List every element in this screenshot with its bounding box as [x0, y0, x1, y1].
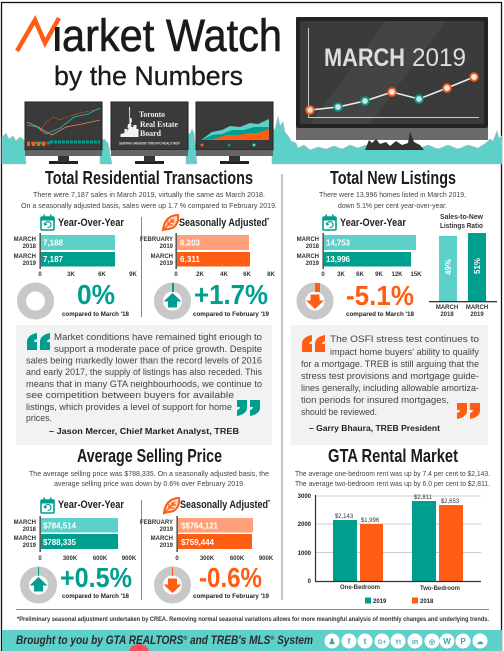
bar chart: 7,188 — [43, 238, 64, 248]
intro text: The average selling price was $788,335. On a seasonally adjusted basis, the — [29, 469, 269, 478]
bar chart — [14, 516, 137, 562]
bar chart: 2018 — [23, 527, 37, 533]
footer text: ® — [270, 635, 275, 642]
quote text: support a moderate pace of price growth. Despite — [54, 344, 262, 354]
seasonally adjusted block — [140, 498, 274, 600]
subheading: Seasonally Adjusted — [179, 217, 286, 229]
bar chart: 2018 — [23, 244, 37, 250]
sales-to-new listings ratio chart: 51% — [473, 258, 482, 274]
bar chart: MARCH — [151, 254, 173, 260]
header banner — [2, 10, 502, 164]
heading: Average Selling Price — [77, 446, 222, 466]
icon: calendar — [41, 214, 54, 230]
quote text: lines generally, including allowable amortiza- — [301, 383, 479, 393]
rental bar chart: $2,811 — [414, 495, 433, 501]
footer text: System — [274, 635, 313, 647]
bar chart: 0 — [174, 272, 178, 278]
social icons: G+ — [378, 640, 387, 646]
quote text: Market conditions have remained tight enough to — [54, 332, 262, 342]
donut: up arrow — [24, 567, 52, 599]
caption: compared to March '18 — [62, 311, 129, 318]
quote text: see competition between buyers for available — [26, 390, 234, 400]
legend — [365, 598, 434, 605]
rental bar chart: 0 — [308, 579, 312, 585]
social icons: ◎ — [429, 639, 435, 646]
sales-to-new listings ratio chart: MARCH — [466, 305, 488, 311]
panel: total new listings — [297, 168, 497, 318]
rental bar chart: $1,996 — [361, 518, 380, 524]
monitor title: March 2019: 2019 — [412, 44, 466, 72]
stat: 0%: 0% — [77, 279, 115, 310]
bar chart: $784,514 — [43, 522, 77, 530]
bar chart: 900K — [259, 556, 274, 562]
quote text — [301, 334, 479, 417]
year-over-year block — [14, 214, 138, 318]
intro text — [29, 469, 269, 488]
subheading: Seasonally Adjusted — [180, 499, 287, 511]
bar chart: MARCH — [14, 520, 36, 526]
rental bar chart: Two-Bedroom — [420, 586, 460, 592]
panel: average selling price — [14, 446, 274, 600]
footnote: *Preliminary seasonal adjustment undertaken by CREA. Removing normal seasonal variations allows for more meaningful analysis of monthly changes and underlying trends. — [17, 617, 489, 623]
footnote rule — [16, 609, 489, 610]
rental bar chart: One-Bedroom — [340, 585, 380, 591]
quote text: listings, which provides a level of support for home — [26, 402, 232, 412]
social icons: Yt — [395, 640, 401, 646]
bar chart: MARCH — [14, 254, 36, 260]
legend: 2019 — [373, 599, 387, 605]
footer text: and TREB's MLS — [187, 635, 271, 647]
quote panel: Garry Bhaura — [291, 325, 488, 445]
bar chart — [297, 233, 422, 278]
intro text: On a seasonally adjusted basis, sales were up 1.7 % compared to February 2019. — [21, 201, 277, 210]
subheading: Year-Over-Year — [58, 499, 125, 511]
subheading: Year-Over-Year — [340, 217, 407, 229]
bar chart: 0 — [175, 556, 179, 562]
bar chart: 0 — [38, 556, 42, 562]
big monitor — [296, 17, 488, 150]
bar chart: 2019 — [160, 244, 174, 250]
caption: compared to March '18 — [346, 311, 414, 318]
subheading: Year-Over-Year — [58, 217, 125, 229]
bar chart: 6K — [356, 272, 365, 278]
intro text — [21, 190, 277, 210]
quote text: tion periods for insured mortgages, — [301, 395, 449, 405]
icon: leaf — [162, 215, 178, 231]
small monitor: area chart — [196, 102, 273, 164]
intro text: down 5.1% per cent year-over-year. — [338, 201, 447, 210]
quote text — [26, 332, 262, 423]
bar chart — [140, 233, 276, 278]
heading: Total New Listings — [330, 168, 456, 188]
social icons: in — [412, 639, 418, 646]
bar chart: 9K — [129, 272, 138, 278]
quote text: sales being markedly lower than the record levels of 2016 — [26, 356, 262, 366]
line chart — [306, 73, 478, 114]
small monitor: Toronto Real Estate Board logo — [111, 102, 188, 164]
bar chart: 14,753 — [326, 238, 351, 248]
social icons: f — [348, 637, 351, 646]
stat: -0.6%: -0.6% — [199, 562, 262, 593]
sales-to-new listings ratio chart: 49% — [444, 259, 453, 275]
intro text: There were 13,996 homes listed in March 2019, — [319, 190, 466, 199]
sales-to-new listings ratio chart — [429, 214, 497, 318]
attribution: – Jason Mercer, Chief Market Analyst, TREB — [49, 426, 239, 436]
bar chart: MARCH — [14, 237, 36, 243]
bar chart: 900K — [122, 556, 137, 562]
bar chart: MARCH — [14, 536, 36, 542]
quote text: for a mortgage. TREB is still arguing that the — [301, 359, 479, 369]
rental bar chart: 2000 — [298, 522, 312, 528]
small monitor: Toronto Real Estate Board logo: Board — [140, 129, 162, 138]
caption: compared to February '19 — [193, 593, 269, 600]
bar chart: $$764,121 — [181, 522, 219, 530]
small monitor: Toronto Real Estate Board logo: Real Estate — [140, 120, 178, 129]
donut: up arrow — [158, 283, 186, 315]
panel: GTA rental market — [295, 446, 490, 605]
subtitle: by the Numbers: by the Numbers — [54, 61, 243, 91]
sales-to-new listings ratio chart: Listings Ratio — [440, 223, 483, 230]
rental bar chart: $2,143 — [335, 514, 354, 520]
bar chart: 600K — [93, 556, 108, 562]
quote text: should be reviewed. — [301, 407, 377, 417]
year-over-year block — [14, 498, 137, 600]
bar chart: 8K — [267, 272, 276, 278]
quote text: and early 2017, the supply of listings has also receded. This — [26, 367, 262, 377]
attribution: – Garry Bhaura, TREB President — [309, 423, 440, 433]
social icons: ☁ — [476, 639, 484, 646]
caption: compared to February '19 — [193, 311, 269, 318]
sales-to-new listings ratio chart: Sales-to-New — [440, 214, 484, 221]
bar chart: 6,311 — [180, 255, 201, 264]
bar chart: 4K — [220, 272, 229, 278]
social icons: W — [443, 637, 451, 646]
footer text: Brought to you by GTA REALTORS — [16, 635, 207, 647]
bar chart: 300K — [63, 556, 78, 562]
quote text: impact home buyers' ability to qualify — [330, 347, 479, 357]
bar chart: 2018 — [306, 244, 320, 250]
footer text: ® — [183, 635, 188, 642]
bar chart: 2019 — [160, 527, 174, 533]
legend: 2018 — [420, 599, 434, 605]
footer bar — [2, 630, 502, 651]
bar chart: 9K — [375, 272, 384, 278]
intro text: There were 7,187 sales in March 2019, virtually the same as March 2018. — [33, 190, 265, 199]
intro text: The average two-bedroom rent was up by 6.0 per cent to $2,811. — [295, 479, 490, 488]
donut: 0% — [22, 287, 50, 315]
bar chart: $788,335 — [43, 538, 77, 547]
bar chart: 3K — [337, 272, 346, 278]
bar chart: 0 — [321, 272, 325, 278]
caption: compared to March '18 — [62, 593, 129, 600]
bar chart: MARCH — [151, 536, 173, 542]
small monitor: stock chart — [25, 102, 102, 164]
social icons: ♟ — [328, 637, 336, 646]
heading: Total Residential Transactions — [45, 168, 253, 188]
icon: leaf — [163, 498, 179, 514]
donut: down arrow — [301, 283, 329, 315]
bar chart: 6K — [98, 272, 107, 278]
rental bar chart — [298, 494, 481, 605]
small monitor: Toronto Real Estate Board logo: SERVING GREATER TORONTO REALTORS® — [119, 140, 180, 146]
monitor title: March 2019: MARCH — [324, 44, 405, 72]
stat: +0.5%: +0.5% — [60, 562, 132, 593]
quote panel: Jason Mercer — [16, 325, 272, 445]
subheading: * — [268, 500, 271, 506]
logo: Market Watch: arket Watch — [62, 10, 282, 61]
bar chart: FEBRUARY — [140, 520, 173, 526]
seasonally adjusted block — [140, 215, 276, 318]
bar chart: 6,203 — [180, 238, 201, 248]
icon: opening quote — [27, 333, 50, 350]
section dividers — [142, 174, 282, 600]
rental bar chart: 3000 — [298, 494, 312, 500]
quote text: The OSFI stress test continues to — [330, 334, 479, 344]
intro text — [319, 190, 466, 210]
bar chart: FEBRUARY — [140, 237, 173, 243]
bar chart: $759,444 — [181, 538, 215, 547]
skyline — [2, 116, 502, 164]
bar chart: 13,996 — [326, 255, 351, 264]
social icons: P — [460, 637, 466, 646]
icon: opening quote — [302, 335, 325, 352]
stat: +1.7%: +1.7% — [194, 279, 268, 310]
bar chart — [14, 233, 138, 278]
quote text: stress test provisions and mortgage guide- — [301, 371, 479, 381]
icon: closing quote — [237, 400, 260, 416]
icon: closing quote — [457, 403, 480, 419]
sales-to-new listings ratio chart: 2018 — [440, 312, 454, 318]
bar chart: 2K — [196, 272, 205, 278]
sales-to-new listings ratio chart: 2019 — [470, 312, 484, 318]
social icons: t — [364, 637, 367, 646]
bar chart — [140, 516, 274, 562]
bar chart: 2019 — [23, 261, 37, 267]
rental bar chart: 1000 — [298, 551, 312, 557]
subheading: * — [267, 218, 270, 224]
bar chart: MARCH — [297, 237, 319, 243]
stat: -5.1%: -5.1% — [346, 280, 414, 311]
quote text: prices. — [26, 413, 52, 423]
bar chart: 300K — [200, 556, 215, 562]
heading: GTA Rental Market — [328, 446, 458, 466]
bar chart: 3K — [67, 272, 76, 278]
donut: down arrow — [158, 567, 186, 599]
social icons — [324, 634, 488, 648]
bar chart: 2019 — [23, 543, 37, 549]
bar chart: 7,187 — [43, 255, 64, 264]
bar chart: 2019 — [306, 261, 320, 267]
bar chart: 0 — [38, 272, 42, 278]
panel: total residential transactions — [14, 168, 277, 318]
intro text — [295, 469, 490, 488]
bar chart: 2019 — [160, 543, 174, 549]
footer logo — [128, 644, 150, 651]
bar chart: MARCH — [297, 254, 319, 260]
bar chart: 15K — [410, 272, 422, 278]
bar chart: 6K — [243, 272, 252, 278]
rental bar chart: $2,653 — [441, 499, 460, 505]
sales-to-new listings ratio chart: MARCH — [436, 305, 458, 311]
bar chart: 2019 — [160, 261, 174, 267]
icon: calendar — [41, 498, 54, 513]
quote text: means that in many GTA neighbourhoods, we continue to — [26, 379, 262, 389]
bar chart: 12K — [391, 272, 403, 278]
intro text: average selling price was down by 0.6% over February 2019. — [54, 479, 245, 488]
small monitor: Toronto Real Estate Board logo: Toronto — [139, 110, 165, 119]
icon: calendar — [323, 214, 336, 230]
bar chart: 600K — [230, 556, 245, 562]
